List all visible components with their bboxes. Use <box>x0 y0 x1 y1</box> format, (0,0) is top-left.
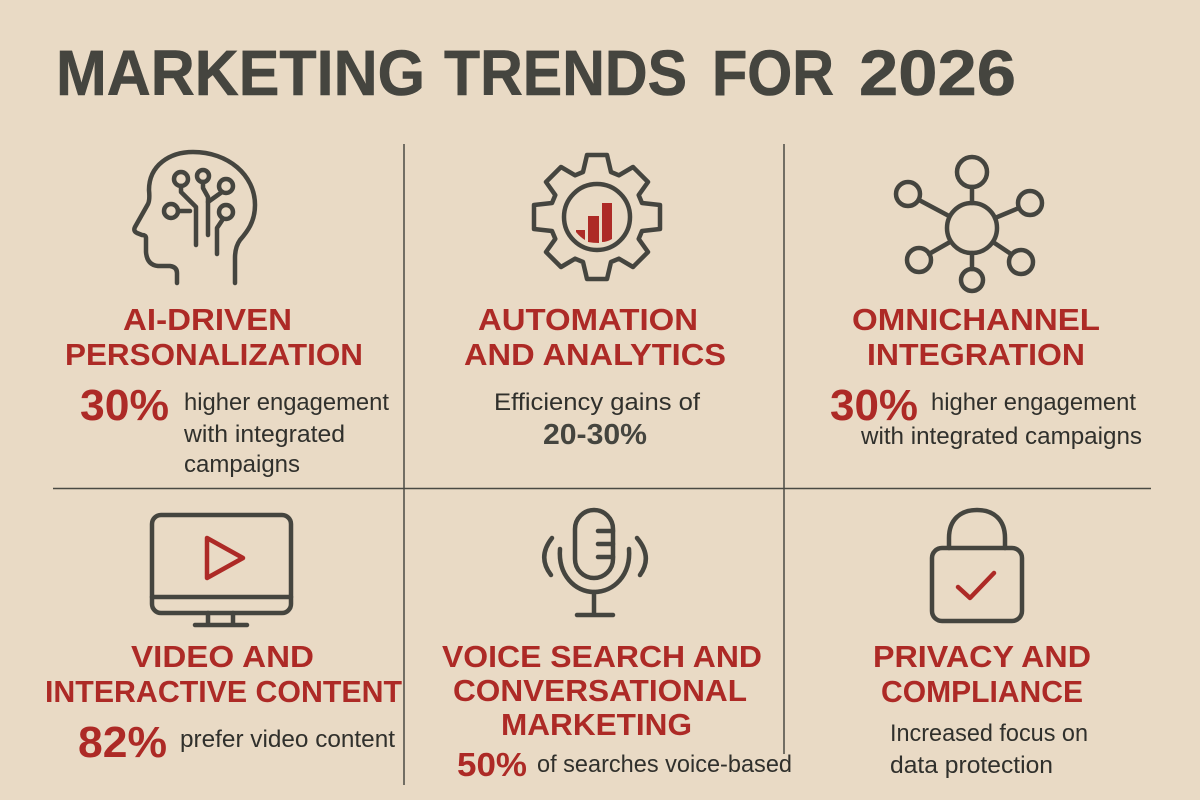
stat: 50% voice-based searches: 50% <box>457 746 527 783</box>
stat: 30% higher engagement: with integrated campaigns <box>860 423 1142 450</box>
heading <box>873 639 1091 709</box>
stat: efficiency gains <box>494 389 700 451</box>
heading: AND ANALYTICS <box>464 337 726 372</box>
title: MARKETING <box>56 37 425 109</box>
panel: automation and analytics <box>464 155 726 451</box>
panel: privacy and compliance <box>873 510 1091 779</box>
stat: 30% higher engagement: with integrated <box>183 421 345 448</box>
stat: 82% prefer video <box>78 718 395 767</box>
heading <box>442 639 762 742</box>
stat: 30% higher engagement <box>80 381 389 478</box>
stat: 30% higher engagement: campaigns <box>184 451 300 478</box>
panel: video and interactive content <box>45 515 402 767</box>
stat: data protection focus <box>890 720 1088 779</box>
panel: AI-driven personalization <box>65 152 389 478</box>
heading <box>65 302 363 372</box>
heading <box>45 639 402 709</box>
icon: padlock with check mark <box>932 510 1022 621</box>
icon: gear with bar chart <box>534 155 660 279</box>
heading <box>464 302 726 372</box>
icon: head with circuits <box>134 152 255 283</box>
stat: 30% higher engagement: higher engagement <box>931 389 1136 416</box>
stat: 30% higher engagement: higher engagement <box>184 389 389 416</box>
heading: MARKETING <box>501 707 692 742</box>
heading: AUTOMATION <box>478 302 698 337</box>
heading: INTERACTIVE CONTENT <box>45 674 402 709</box>
icon: hub network <box>896 157 1042 291</box>
panel: voice search and conversational marketing <box>442 510 792 783</box>
heading: OMNICHANNEL <box>852 302 1100 337</box>
heading: PRIVACY AND <box>873 639 1091 674</box>
heading: AI-DRIVEN <box>123 302 292 337</box>
panel: omnichannel integration <box>830 157 1142 450</box>
stat: 82% prefer video: 82% <box>78 718 167 767</box>
stat: data protection focus: data protection <box>890 752 1053 779</box>
heading: PERSONALIZATION <box>65 337 363 372</box>
heading: INTEGRATION <box>867 337 1085 372</box>
stat: efficiency gains: Efficiency gains of <box>494 389 700 416</box>
heading <box>852 302 1100 372</box>
stat: 50% voice-based searches: of searches voice-based <box>537 751 792 778</box>
stat: 30% higher engagement: 30% <box>80 381 169 430</box>
stat: 30% higher engagement <box>830 381 1142 450</box>
stat: 82% prefer video: prefer video content <box>180 726 395 753</box>
title: TRENDS <box>444 37 687 109</box>
heading: VIDEO AND <box>131 639 314 674</box>
stat: 50% voice-based searches <box>457 746 792 783</box>
title: 2026 <box>859 37 1016 109</box>
icon: monitor with play button <box>152 515 291 625</box>
title <box>56 37 1016 109</box>
heading: COMPLIANCE <box>881 674 1083 709</box>
stat: 30% higher engagement: 30% <box>830 381 918 430</box>
heading: CONVERSATIONAL <box>453 673 747 708</box>
title: FOR <box>712 37 834 109</box>
icon: microphone with sound waves <box>544 510 646 615</box>
heading: VOICE SEARCH AND <box>442 639 762 674</box>
stat: efficiency gains: 20-30% <box>543 419 647 451</box>
stat: data protection focus: Increased focus on <box>890 720 1088 747</box>
